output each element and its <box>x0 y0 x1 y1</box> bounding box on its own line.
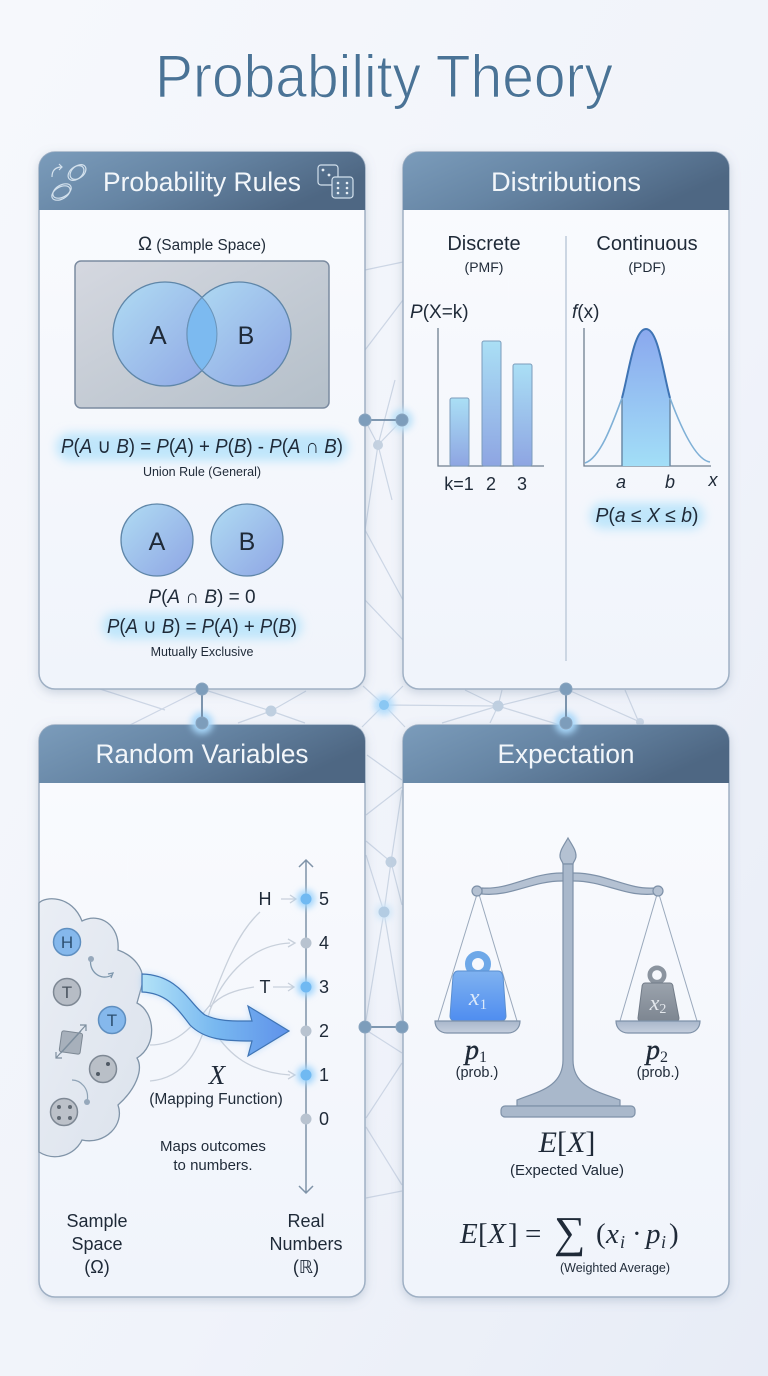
mutually exclusive formula: P(A ∪ B) = P(A) + P(B) <box>107 616 297 638</box>
bar chart: pmf: 2 <box>486 474 496 494</box>
icon: coins <box>49 162 89 203</box>
panel: expectation <box>403 725 729 1297</box>
heading: probability rules: Probability Rules <box>103 167 301 197</box>
label: p1: 1 <box>479 1049 487 1066</box>
label: mapping function: X <box>208 1060 227 1090</box>
heading: distributions: Distributions <box>491 167 641 197</box>
label: real numbers: Numbers <box>269 1234 343 1254</box>
bar chart: pmf <box>410 302 544 494</box>
note: maps outcomes: to numbers. <box>173 1157 253 1174</box>
expectation formula: X <box>487 1218 507 1250</box>
expectation formula: ] <box>508 1218 518 1250</box>
number line <box>258 860 329 1193</box>
disjoint circles: B <box>239 528 255 556</box>
note: maps outcomes: Maps outcomes <box>160 1138 266 1155</box>
mapping lines <box>150 895 296 1081</box>
expectation formula: (Weighted Average) <box>560 1261 670 1275</box>
label: p2: p <box>646 1035 660 1066</box>
expectation formula <box>459 1208 679 1275</box>
bell curve: pdf: b <box>665 472 675 492</box>
label: sample space: (Ω) <box>84 1257 110 1277</box>
label: expected value: E[X] <box>538 1126 595 1159</box>
disjoint circles <box>121 504 283 576</box>
disjoint circles: A <box>149 528 166 556</box>
probability interval formula: P(a ≤ X ≤ b) <box>596 505 698 527</box>
weight: x1: 1 <box>480 997 487 1013</box>
pan: left <box>435 1021 520 1033</box>
sample space label: Ω (Sample Space) <box>138 234 266 255</box>
bar chart: pmf: k=1 <box>444 474 474 494</box>
heading: discrete: Discrete <box>447 233 521 255</box>
label: pdf: (PDF) <box>628 259 666 275</box>
bell curve: pdf <box>572 302 718 492</box>
expectation formula: i <box>620 1232 625 1252</box>
number line: 0 <box>319 1109 329 1129</box>
bell curve: pdf: f(x) <box>572 302 599 323</box>
expectation formula: i <box>661 1232 666 1252</box>
pan: right <box>616 1021 700 1033</box>
number line: 5 <box>319 889 329 909</box>
label: p1 <box>456 1035 498 1081</box>
label: mapping function <box>149 1060 283 1108</box>
bell curve: pdf: x <box>708 470 718 490</box>
bar chart: pmf: 3 <box>517 474 527 494</box>
label: real numbers: Real <box>287 1211 325 1231</box>
mapping arrow <box>142 974 289 1056</box>
background network <box>100 262 644 1198</box>
bar chart: pmf: P(X=k) <box>410 302 469 323</box>
expectation formula: ) <box>669 1218 679 1250</box>
number line: 3 <box>319 977 329 997</box>
expectation formula: E <box>459 1218 478 1250</box>
sample space cloud: T <box>107 1011 117 1030</box>
expectation formula: x <box>605 1218 619 1250</box>
panel: probability rules <box>39 152 365 689</box>
disjoint intersection formula: P(A ∩ B) = 0 <box>148 587 256 608</box>
caption: union rule: Union Rule (General) <box>143 465 261 479</box>
union rule formula: P(A ∪ B) = P(A) + P(B) - P(A ∩ B) <box>61 436 343 458</box>
number line: 4 <box>319 933 329 953</box>
sample space cloud <box>39 899 152 1157</box>
divider <box>565 236 567 661</box>
label: p1: (prob.) <box>456 1065 498 1081</box>
label: real numbers: (ℝ) <box>293 1257 319 1277</box>
weight: x2: x <box>650 990 659 1015</box>
venn diagram: B <box>238 322 254 350</box>
bell curve: pdf: a <box>616 472 626 492</box>
number line: 1 <box>319 1065 329 1085</box>
panel: random variables <box>39 725 365 1297</box>
number line: H <box>258 889 272 909</box>
heading: random variables: Random Variables <box>96 739 308 769</box>
weight: x1: x <box>469 985 480 1011</box>
expectation formula: ( <box>596 1218 606 1250</box>
label: expected value: (Expected Value) <box>510 1162 624 1179</box>
caption: mutually exclusive: Mutually Exclusive <box>151 645 253 659</box>
weight: x2 <box>638 968 679 1021</box>
expectation formula: ∑ <box>554 1208 585 1257</box>
label: p1: p <box>465 1035 479 1066</box>
expectation formula: = <box>525 1218 541 1250</box>
expectation formula: p <box>644 1218 660 1250</box>
heading: continuous: Continuous <box>596 233 698 255</box>
panel: distributions <box>403 152 729 689</box>
label: mapping function: (Mapping Function) <box>149 1091 283 1108</box>
weight: x2: 2 <box>659 1002 666 1017</box>
label: p2: (prob.) <box>637 1065 679 1081</box>
label: expected value <box>510 1126 624 1179</box>
venn diagram: A <box>149 320 167 350</box>
label: pmf: (PMF) <box>465 259 503 275</box>
label: sample space: Sample <box>66 1211 128 1231</box>
connectors between panels <box>191 409 577 1033</box>
sample space cloud: H <box>61 933 73 952</box>
number line: 2 <box>319 1021 329 1041</box>
icon: dice <box>318 165 353 198</box>
heading: expectation: Expectation <box>498 739 634 769</box>
label: p2: 2 <box>660 1049 668 1066</box>
label: p2 <box>637 1035 679 1081</box>
venn diagram <box>75 261 329 408</box>
expectation formula: [ <box>478 1218 488 1250</box>
sample space cloud: T <box>62 983 72 1002</box>
title: Probability Theory <box>155 43 613 110</box>
balance scale <box>435 838 700 1117</box>
weight: x1 <box>450 954 506 1021</box>
label: sample space: Space <box>71 1234 123 1254</box>
expectation formula: · <box>632 1218 642 1250</box>
number line: T <box>260 977 270 997</box>
